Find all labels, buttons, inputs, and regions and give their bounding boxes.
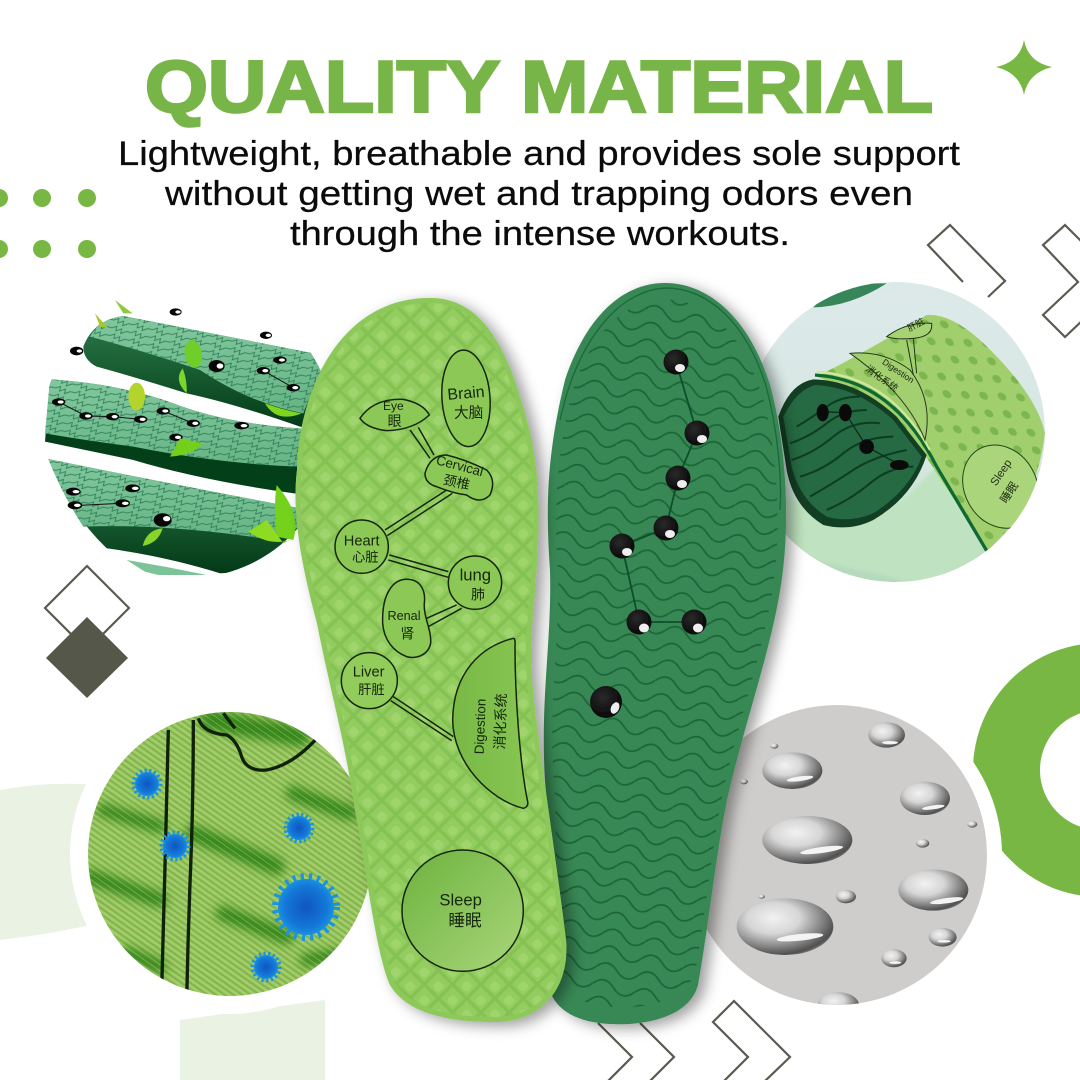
- background pale shape left: [0, 784, 96, 940]
- water droplets: [737, 722, 977, 1018]
- flexed insole printed labels: 消化系统: [864, 363, 900, 394]
- brain zone: 大脑: [454, 404, 483, 421]
- eye zone: 眼: [388, 413, 402, 429]
- digestion zone: 消化系统: [491, 693, 509, 750]
- lung zone: [448, 556, 502, 609]
- heart zone: Heart: [344, 534, 380, 550]
- lung zone: 肺: [471, 586, 485, 602]
- white ring carving bottom-left circle: [70, 694, 390, 1014]
- sleep zone: Sleep: [439, 890, 482, 909]
- heart zone: [335, 520, 388, 573]
- insole rim shading: [296, 298, 566, 1022]
- panel: bottom-left fabric photo with bacteria: [88, 712, 372, 1002]
- panel: bottom-right water droplets photo: [706, 705, 987, 1005]
- stitching lines: [162, 713, 318, 1002]
- subtitle text block: Lightweight, breathable and provides sole support: [118, 135, 960, 173]
- cervical zone: [425, 452, 493, 500]
- right insole, dark green sole: [544, 283, 786, 1024]
- cervical zone: 颈椎: [442, 472, 471, 492]
- darker fabric bands: [90, 720, 360, 967]
- photo background: [745, 282, 1045, 582]
- left insole, light green reflexology side: [296, 298, 566, 1022]
- lung zone: lung: [460, 566, 491, 585]
- eye zone: Eye: [383, 399, 404, 413]
- digestion zone: [453, 638, 528, 808]
- background pale shape bottom: [180, 1000, 325, 1080]
- renal zone: Renal: [387, 609, 421, 623]
- subtitle text block: through the intense workouts.: [290, 215, 790, 253]
- flexed insole printed labels: 肝脏: [905, 315, 926, 333]
- fabric background: [88, 712, 372, 996]
- sleep zone: 睡眠: [448, 911, 482, 930]
- liver zone: 肝脏: [358, 682, 385, 697]
- flexed insole sleep label: [990, 460, 1019, 504]
- chevrons top right: [928, 225, 1080, 337]
- chevrons bottom: [598, 1001, 790, 1080]
- flexed insole sleep label: Sleep: [989, 458, 1015, 488]
- liver zone: Liver: [353, 665, 385, 681]
- panel: top-right photo of flexed insole: [745, 282, 1053, 587]
- icon: four-point star: [996, 40, 1052, 95]
- outlined and filled diamonds: [45, 566, 129, 698]
- white ring carving bottom-right circle: [672, 690, 1002, 1020]
- sleep zone: [402, 850, 523, 971]
- flexed insole printed labels: [864, 315, 926, 394]
- rolled insole: [778, 283, 1053, 587]
- panel: top-left photo of insole soles with leaves: [45, 300, 327, 575]
- sole body: [544, 283, 786, 1024]
- flexed insole printed labels: Digestion: [881, 357, 916, 385]
- renal zone: [383, 579, 431, 657]
- liver zone: [341, 653, 397, 709]
- brain zone: Brain: [447, 384, 485, 404]
- insole body: [296, 298, 566, 1022]
- reflexology chart upper: [335, 348, 502, 657]
- digestion zone: Digestion: [472, 698, 489, 755]
- knit texture: [88, 712, 372, 996]
- grey surface: [687, 705, 987, 1005]
- title: QUALITY MATERIAL: [145, 47, 933, 128]
- bead connector lines: [622, 362, 697, 622]
- renal zone: 肾: [400, 626, 414, 642]
- insole strips: [45, 316, 327, 575]
- wave tread: [552, 300, 778, 1007]
- green ring decoration right: [973, 643, 1080, 897]
- icon: bacteria cluster: [134, 771, 336, 980]
- brain zone: [439, 348, 493, 448]
- reflexology chart lower: [341, 638, 528, 971]
- heart zone: 心脏: [352, 550, 379, 565]
- eye zone: [360, 399, 429, 431]
- subtitle text block: without getting wet and trapping odors even: [164, 175, 913, 213]
- flexed insole sleep label: 睡眠: [998, 480, 1021, 506]
- magnetic beads: [590, 350, 710, 718]
- beads and leaves: [52, 300, 302, 546]
- cervical zone: Cervical: [435, 452, 485, 479]
- subtitle text block: [118, 135, 960, 253]
- inner outline: [560, 288, 780, 510]
- dot grid decoration: [0, 189, 96, 258]
